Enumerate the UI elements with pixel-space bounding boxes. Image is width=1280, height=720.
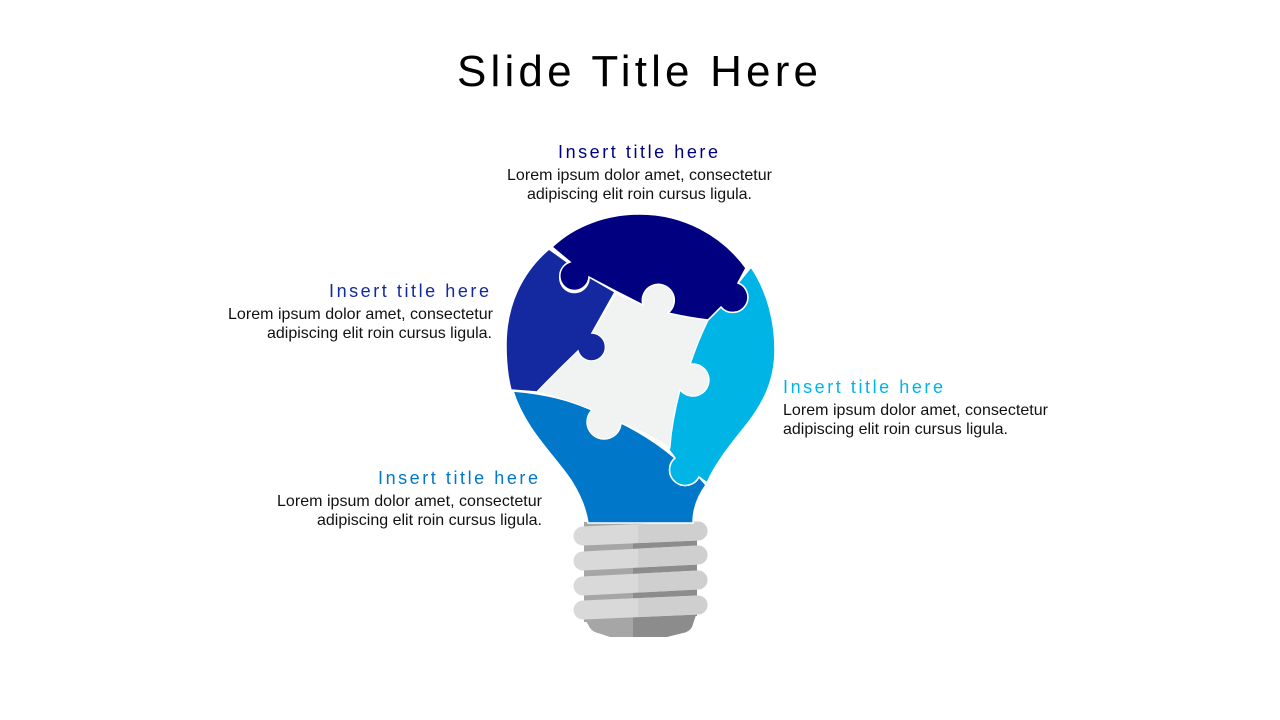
heading: top: Insert title here bbox=[558, 142, 718, 162]
body: bottom left bbox=[277, 493, 543, 529]
body: bottom left: Lorem ipsum dolor amet, consectetur bbox=[277, 493, 543, 510]
puzzle piece: navy top bbox=[552, 214, 748, 320]
body: top: adipiscing elit roin cursus ligula. bbox=[527, 186, 752, 203]
body: top: Lorem ipsum dolor amet, consectetur bbox=[507, 167, 773, 184]
bulb screw base bbox=[583, 522, 698, 637]
text block: left bbox=[228, 281, 494, 342]
body: left: Lorem ipsum dolor amet, consectetur bbox=[228, 306, 494, 323]
body: top bbox=[507, 167, 773, 203]
heading: left: Insert title here bbox=[329, 281, 489, 301]
body: left bbox=[228, 306, 494, 342]
text block: bottom left bbox=[277, 468, 543, 529]
text block: top bbox=[507, 142, 773, 203]
icon: light bulb bbox=[506, 214, 775, 637]
text block: right bbox=[783, 377, 1049, 438]
puzzle piece: royal blue left bbox=[506, 249, 615, 392]
body: right bbox=[783, 402, 1049, 438]
title: Slide Title Here bbox=[457, 47, 818, 96]
puzzle piece: cyan right bbox=[669, 267, 775, 485]
puzzle piece: medium blue bottom bbox=[513, 391, 706, 523]
heading: right: Insert title here bbox=[783, 377, 943, 397]
heading: bottom left: Insert title here bbox=[378, 468, 538, 488]
body: left: adipiscing elit roin cursus ligula. bbox=[267, 325, 492, 342]
body: bottom left: adipiscing elit roin cursus ligula. bbox=[317, 512, 542, 529]
body: right: Lorem ipsum dolor amet, consectetur bbox=[783, 402, 1049, 419]
body: right: adipiscing elit roin cursus ligula. bbox=[783, 421, 1008, 438]
puzzle piece: light grey centre bbox=[537, 284, 709, 448]
